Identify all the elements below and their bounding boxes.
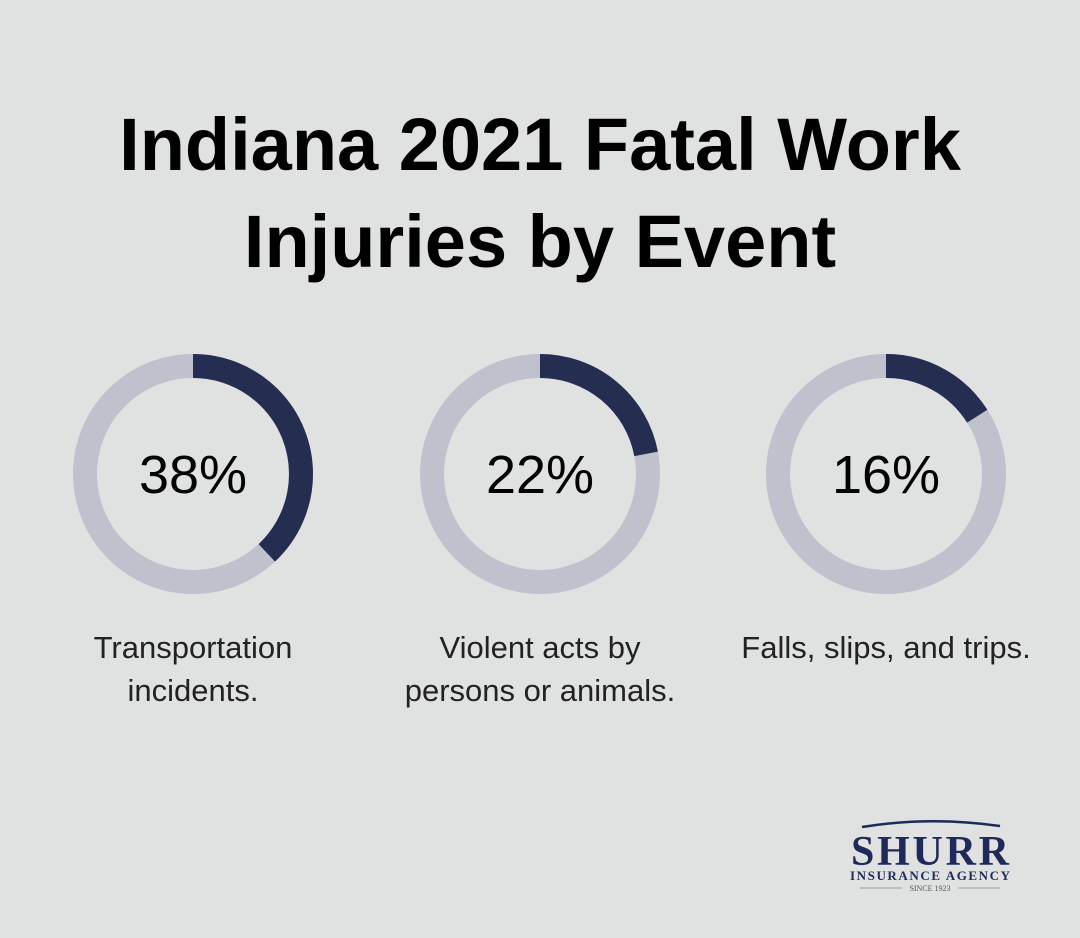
- donut: 16%: [778, 366, 994, 582]
- label: violent acts: Violent acts by: [439, 630, 641, 665]
- donut: 22%: 22%: [486, 445, 594, 505]
- logo: [850, 820, 1011, 893]
- donut: 38%: [85, 366, 301, 582]
- title: Injuries by Event: [244, 200, 836, 283]
- logo: SHURR: [851, 829, 1010, 875]
- title: Indiana 2021 Fatal Work: [119, 103, 961, 186]
- label: transportation: incidents.: [128, 673, 258, 708]
- donut: 38%: 38%: [139, 445, 247, 505]
- title: [119, 103, 961, 283]
- label: violent acts: [405, 630, 675, 708]
- logo: SINCE 1923: [909, 884, 951, 893]
- donut: 16%: 16%: [832, 445, 940, 505]
- logo: INSURANCE AGENCY: [850, 868, 1011, 883]
- donut: 22%: [432, 366, 648, 582]
- label: violent acts: persons or animals.: [405, 673, 675, 708]
- label: transportation: Transportation: [94, 630, 292, 665]
- label: transportation: [94, 630, 292, 708]
- label: falls: Falls, slips, and trips.: [741, 630, 1031, 665]
